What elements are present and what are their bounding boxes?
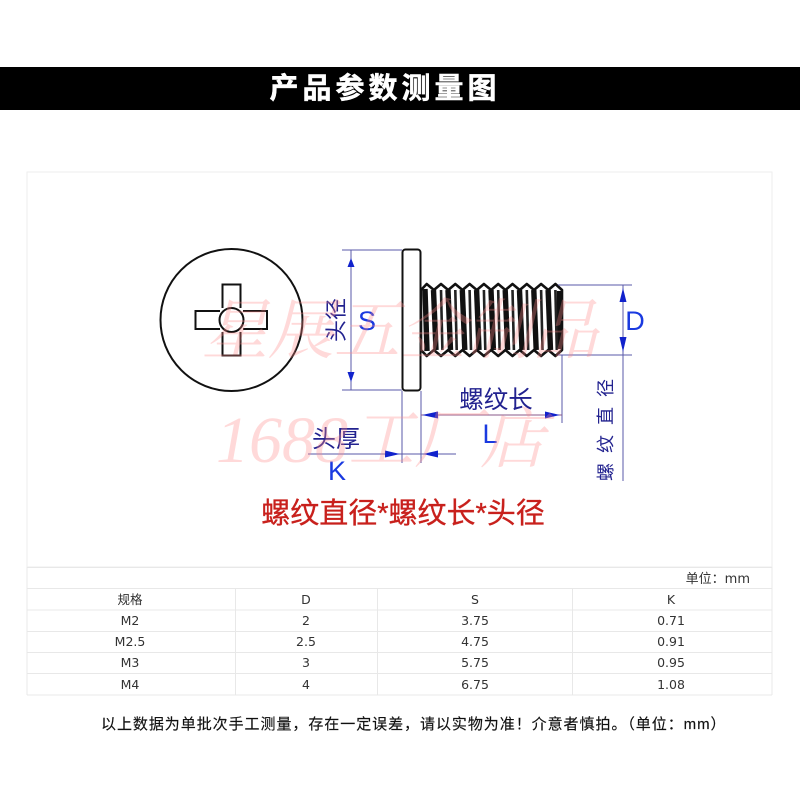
table header: D [301,592,311,607]
screw thread [421,284,562,356]
row M4: 1.08 [657,677,685,692]
table header: S [471,592,479,607]
row M2.5: 2.5 [296,634,316,649]
row M2.5: M2.5 [115,634,145,649]
row M4 [121,677,685,692]
table header: K [667,592,676,607]
row M4: M4 [121,677,139,692]
screw head side [402,250,420,390]
row M3 [121,655,685,670]
row M2: 2 [302,613,310,628]
row M2: 3.75 [461,613,489,628]
icon: screw head top view [160,249,302,391]
panel: diagram frame [27,172,772,567]
dimension D [558,285,645,481]
title: 产品参数测量图 [269,72,501,105]
label: K: K [328,456,346,486]
label: D: D [625,306,645,336]
icon: screw side view [402,250,562,390]
row M4: 6.75 [461,677,489,692]
label: S: S [358,306,376,336]
row M2.5 [115,634,685,649]
row M2: M2 [121,613,139,628]
row M3: M3 [121,655,139,670]
table [27,567,772,695]
label: head thickness: 头厚 [312,426,360,453]
label: thread diameter: 螺纹直径 [596,369,616,481]
row M3: 3 [302,655,310,670]
row M2.5: 4.75 [461,634,489,649]
watermark: factory store: 1688工厂店 [216,404,555,477]
dimension K [308,391,456,486]
unit note: 单位：mm [686,572,750,587]
row M2 [121,613,685,628]
table grid [27,567,772,695]
watermark: shop name: 星展五金制品 [202,295,601,368]
label: head diameter: 头径 [324,298,349,342]
row M2: 0.71 [657,613,685,628]
row M3: 5.75 [461,655,489,670]
row M2.5: 0.91 [657,634,685,649]
title bar [0,67,800,110]
table header: 规格 [117,592,143,607]
formula caption: 螺纹直径*螺纹长*头径 [261,497,545,530]
label: L: L [482,419,498,449]
footer note: 以上数据为单批次手工测量，存在一定误差，请以实物为准！介意者慎拍。（单位：mm） [101,715,726,733]
row M3: 0.95 [657,655,685,670]
label: thread length: 螺纹长 [459,386,533,414]
dimension S [324,250,402,390]
table header [117,592,676,607]
row M4: 4 [302,677,310,692]
dimension L [421,355,562,463]
